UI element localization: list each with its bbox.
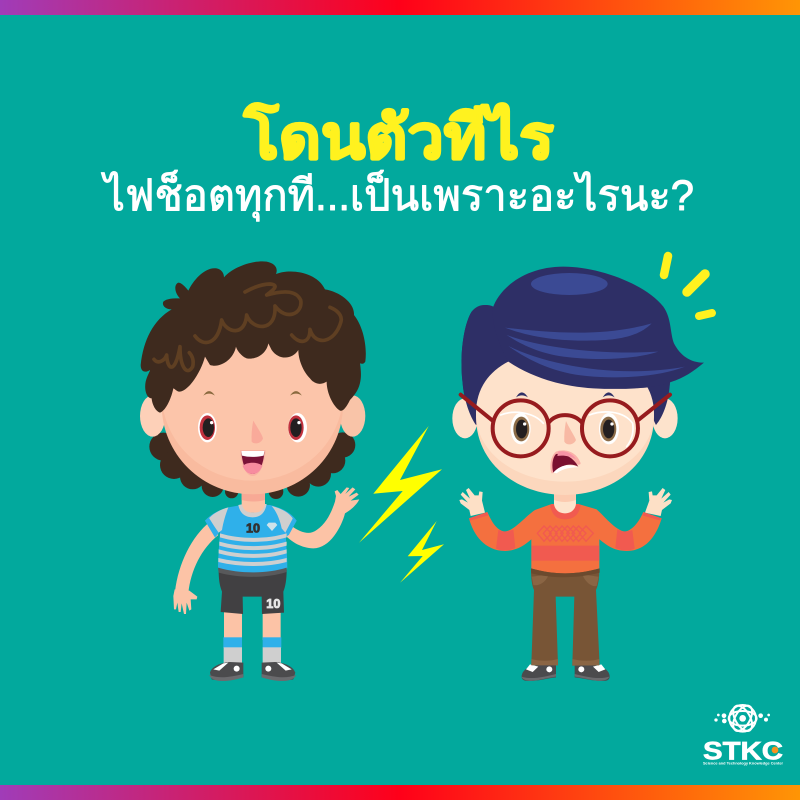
trousers: [531, 569, 599, 666]
neck: [554, 490, 576, 513]
top gradient bar: [0, 0, 800, 15]
atom dots: [714, 713, 770, 723]
logo orange dot: [772, 747, 778, 753]
nose: [252, 421, 263, 443]
trouser cuffs and pockets: [531, 575, 599, 666]
face: [162, 306, 343, 494]
character: boy with glasses, head: [452, 267, 704, 495]
right arm and waving hand: [287, 487, 359, 548]
left ear: [140, 395, 165, 437]
number on shorts: 10: [266, 597, 280, 611]
subtitle: ไฟช็อตทุกที...เป็นเพราะอะไรนะ?: [101, 170, 694, 222]
right ear: [340, 395, 365, 437]
main hair: [493, 267, 704, 389]
character: boy with glasses, body: [459, 488, 672, 681]
hair highlights: [505, 273, 685, 377]
left eye: [198, 413, 217, 442]
back hair: [149, 432, 355, 499]
sweater: [469, 504, 662, 577]
hair left lock over ear: [461, 305, 510, 425]
STKC logo: [703, 703, 784, 766]
left hand: [173, 589, 197, 614]
legs: [224, 612, 281, 640]
right shoe: [262, 662, 296, 681]
hair behind head: [461, 305, 670, 425]
left ear: [452, 398, 478, 438]
shorts: [219, 570, 287, 614]
lightning bolt large: [359, 426, 442, 543]
right eye: [288, 413, 307, 442]
left hand: [459, 488, 485, 516]
hair curl highlights: [154, 284, 341, 371]
left eye: [511, 413, 531, 444]
mouth: [240, 450, 266, 476]
nose: [564, 421, 576, 444]
glasses: [461, 395, 670, 456]
face: [476, 350, 654, 495]
shirt: 10: [246, 521, 260, 535]
character: curly-haired boy, body: [173, 487, 359, 681]
lightning bolt small: [400, 521, 444, 583]
shoes: [521, 664, 610, 681]
character: curly-haired boy, head: [140, 261, 366, 499]
logo tagline: Science and Technology Knowledge Center: [703, 761, 784, 765]
title: โดนตัวทีไร: [243, 102, 554, 171]
surprise marks: [664, 256, 712, 316]
mouth: [550, 450, 581, 473]
right ear: [652, 398, 678, 438]
right hand: [645, 488, 672, 516]
eyebrows: [516, 392, 615, 397]
neck: [242, 490, 265, 513]
logo wordmark: STKC: [703, 739, 783, 766]
atom icon: [729, 703, 757, 734]
lens glints: [501, 412, 633, 447]
left shoe: [209, 662, 243, 681]
socks: [223, 637, 281, 663]
eyebrows: [203, 391, 302, 396]
hair: [141, 261, 366, 413]
left arm: [175, 522, 218, 593]
right eye: [599, 413, 619, 444]
shirt: [205, 504, 297, 577]
bottom gradient bar: [0, 785, 800, 800]
